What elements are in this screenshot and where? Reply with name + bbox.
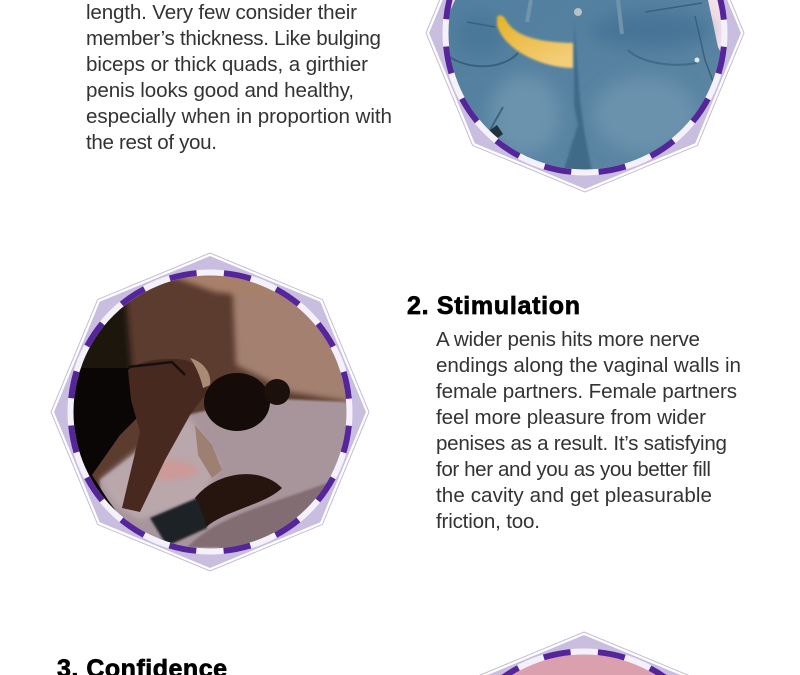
text block: section 2 body: feel more pleasure from wider [436, 406, 706, 429]
text block: section 1 body: the rest of you. [86, 131, 217, 154]
photo: pink backdrop [446, 653, 722, 675]
text block: section 2 body: the cavity and get pleasurable [436, 484, 712, 507]
text block: section 2 body: A wider penis hits more nerve [436, 328, 700, 351]
text block: section 2 body: for her and you as you better fill [436, 458, 711, 481]
text block: section 2 body: female partners. Female partners [436, 380, 737, 403]
dashed ring [70, 272, 350, 552]
text block: section 2 body: endings along the vaginal walls in [436, 354, 741, 377]
text block: section 1 body: biceps or thick quads, a girthier [86, 53, 368, 76]
text block: section 2 body [436, 328, 741, 533]
octagon frame [426, 0, 744, 192]
photo: denim jeans with banana [448, 0, 722, 170]
octagon frame [425, 632, 743, 675]
dashed ring [446, 0, 724, 172]
photo: couple on a bed [74, 276, 346, 548]
text block: section 2 body: friction, too. [436, 510, 540, 533]
text block: section 1 body: penis looks good and healthy, [86, 79, 354, 102]
heading: 2. Stimulation: 2. Stimulation [407, 292, 580, 320]
text block: section 1 body: member’s thickness. Like bulging [86, 27, 381, 50]
text block: section 1 body [86, 1, 392, 154]
banana [497, 15, 573, 68]
panel: section 2 bedroom image badge [51, 253, 369, 571]
octagon frame [51, 253, 369, 571]
text block: section 1 body: especially when in proportion with [86, 105, 392, 128]
text block: section 2 body: penises as a result. It’s satisfying [436, 432, 727, 455]
dashed ring [444, 652, 724, 675]
text block: section 1 body: length. Very few consider their [86, 1, 357, 24]
panel: section 3 image badge [425, 632, 743, 675]
panel: section 1 jeans image badge [426, 0, 744, 192]
